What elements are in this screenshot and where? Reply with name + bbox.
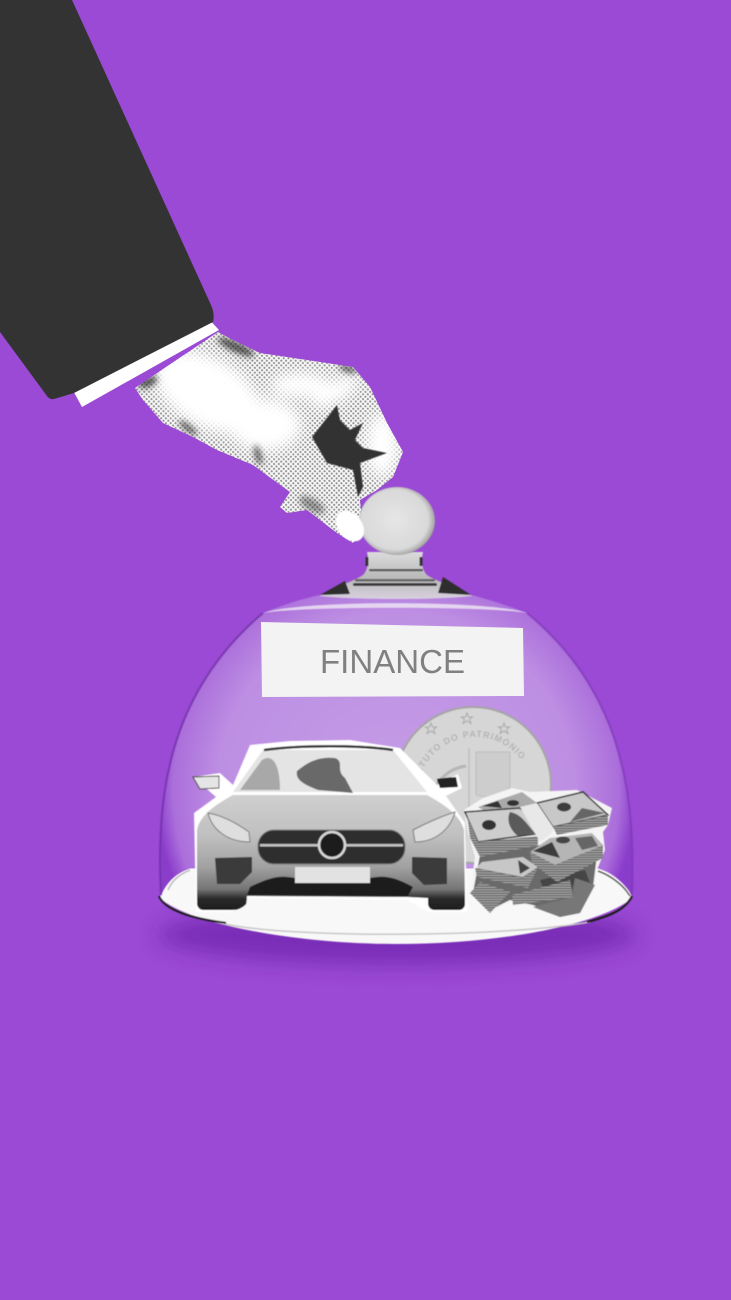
hand shadows xyxy=(137,334,357,517)
car xyxy=(193,740,467,912)
illustration: hand lifting glass dome over finance assets xyxy=(0,0,636,972)
right air intake xyxy=(412,857,447,885)
glass dome body xyxy=(160,595,633,895)
sleeve and cuff xyxy=(0,0,219,407)
glass dome neck xyxy=(320,552,472,599)
bottom right stack xyxy=(533,870,595,917)
top right stack xyxy=(537,792,608,835)
fingertip over knob xyxy=(330,505,370,547)
roof line xyxy=(264,746,393,750)
label text: FINANCE xyxy=(320,643,465,680)
dark gap between fingers xyxy=(312,405,387,497)
top left stack xyxy=(465,808,550,857)
cash shadow backing xyxy=(473,845,597,915)
bottom middle stack xyxy=(512,880,573,905)
lower bumper xyxy=(247,877,413,896)
cash cutout outline xyxy=(464,788,612,917)
badge xyxy=(319,832,345,858)
glass dome shadow xyxy=(157,905,637,965)
label: finance xyxy=(261,622,524,697)
car cutout outline xyxy=(193,740,467,912)
left headlight xyxy=(208,813,250,842)
left air intake xyxy=(215,857,252,884)
coin lettering: INSTITUTO DO PATRIMÓNIO xyxy=(418,730,525,770)
grille bar xyxy=(260,844,403,846)
cash stacks xyxy=(464,788,612,917)
glass dome knob xyxy=(359,487,435,555)
right headlight xyxy=(413,812,455,842)
hand xyxy=(135,332,403,543)
back stack xyxy=(478,792,537,810)
left mirror xyxy=(193,776,219,789)
middle right stack xyxy=(530,833,603,882)
coin xyxy=(402,706,552,864)
bottom left stack xyxy=(470,882,510,913)
right mirror xyxy=(437,777,458,788)
windshield grey patch xyxy=(240,758,280,790)
car body xyxy=(197,795,465,910)
windshield xyxy=(233,750,427,792)
middle left stack xyxy=(475,857,538,888)
grille xyxy=(258,830,405,864)
windshield reflection xyxy=(297,758,353,793)
hand highlights xyxy=(141,334,398,477)
license plate xyxy=(295,867,370,883)
paper band xyxy=(520,803,553,842)
glass dome plate xyxy=(159,868,632,944)
